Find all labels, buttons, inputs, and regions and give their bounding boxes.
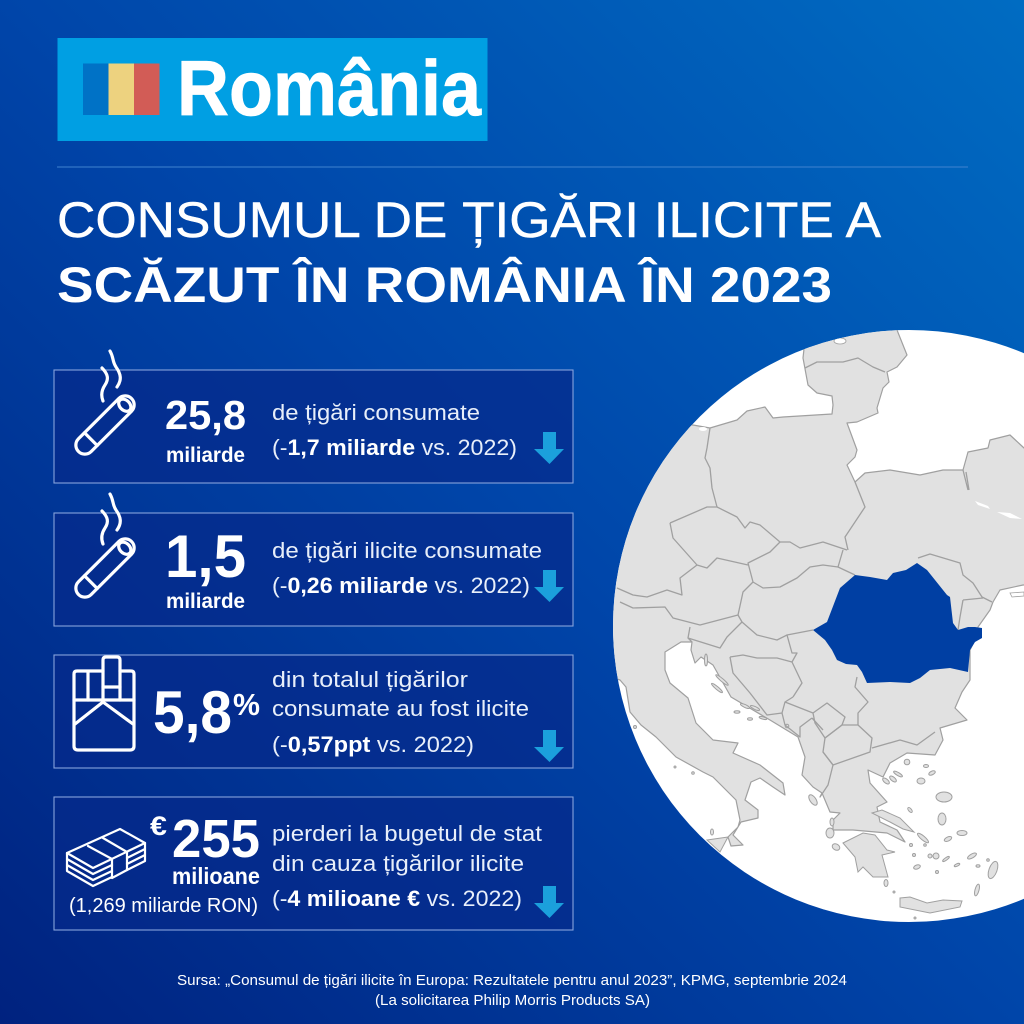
description: pierderi la bugetul de stat xyxy=(272,821,542,846)
value: 5,8 xyxy=(153,679,232,746)
description xyxy=(272,667,529,757)
description: de țigări ilicite consumate xyxy=(272,538,542,563)
icon: cigarette with smoke xyxy=(72,494,138,601)
icon: cigarette pack xyxy=(74,657,134,750)
source note: Sursa: „Consumul de țigări ilicite în Europa: Rezultatele pentru anul 2023”, KPMG, septembrie 2024 xyxy=(177,973,847,989)
description: din cauza țigărilor ilicite xyxy=(272,851,524,876)
panel: illicit share xyxy=(54,655,573,768)
land: Crete xyxy=(900,897,962,913)
panel: illicit cigarettes consumed xyxy=(54,494,573,626)
RON equivalent: (1,269 miliarde RON) xyxy=(69,895,258,917)
country name: România xyxy=(177,44,482,132)
arrow: down xyxy=(534,730,564,762)
percent sign: % xyxy=(233,687,260,722)
land: Aegean, Ionian and Adriatic islands xyxy=(634,654,1000,919)
title: SCĂZUT ÎN ROMÂNIA ÎN 2023 xyxy=(57,257,832,313)
description xyxy=(272,400,517,460)
icon: money stack xyxy=(67,829,145,886)
title xyxy=(57,192,882,313)
description xyxy=(272,538,542,598)
unit: milioane xyxy=(172,863,260,889)
source note: (La solicitarea Philip Morris Products SA) xyxy=(375,993,650,1009)
description: (-4 milioane € vs. 2022) xyxy=(272,886,522,911)
euro sign: € xyxy=(150,811,167,841)
arrow: down xyxy=(534,432,564,464)
icon: cigarette with smoke xyxy=(72,351,138,458)
title: CONSUMUL DE ȚIGĂRI ILICITE A xyxy=(57,192,882,248)
description: din totalul țigărilor xyxy=(272,667,468,692)
header: country label xyxy=(58,38,488,141)
arrow: down xyxy=(534,570,564,602)
arrow: down xyxy=(534,886,564,918)
land: Sicily xyxy=(707,837,728,852)
description: (-0,26 miliarde vs. 2022) xyxy=(272,573,530,598)
panel: total cigarettes consumed xyxy=(54,351,573,483)
description: de țigări consumate xyxy=(272,400,480,425)
icon: Romanian flag xyxy=(83,64,160,115)
land: Euboea xyxy=(872,810,914,832)
description: (-1,7 miliarde vs. 2022) xyxy=(272,435,517,460)
description: consumate au fost ilicite xyxy=(272,696,529,721)
value: 1,5 xyxy=(165,523,246,590)
description xyxy=(272,821,542,911)
land: surrounding countries xyxy=(613,330,1024,847)
source note xyxy=(177,973,847,1009)
unit: miliarde xyxy=(166,590,245,613)
description: (-0,57ppt vs. 2022) xyxy=(272,732,474,757)
land: Peloponnese xyxy=(843,833,895,877)
panel: budget losses xyxy=(54,797,573,930)
value: 25,8 xyxy=(165,392,246,438)
value: 255 xyxy=(172,809,260,869)
highlighted country: Romania xyxy=(813,563,982,683)
rivers and lagoons xyxy=(699,338,1024,597)
borders between countries xyxy=(617,358,992,797)
unit: miliarde xyxy=(166,444,245,467)
map: Eastern Europe globe xyxy=(590,300,1024,922)
